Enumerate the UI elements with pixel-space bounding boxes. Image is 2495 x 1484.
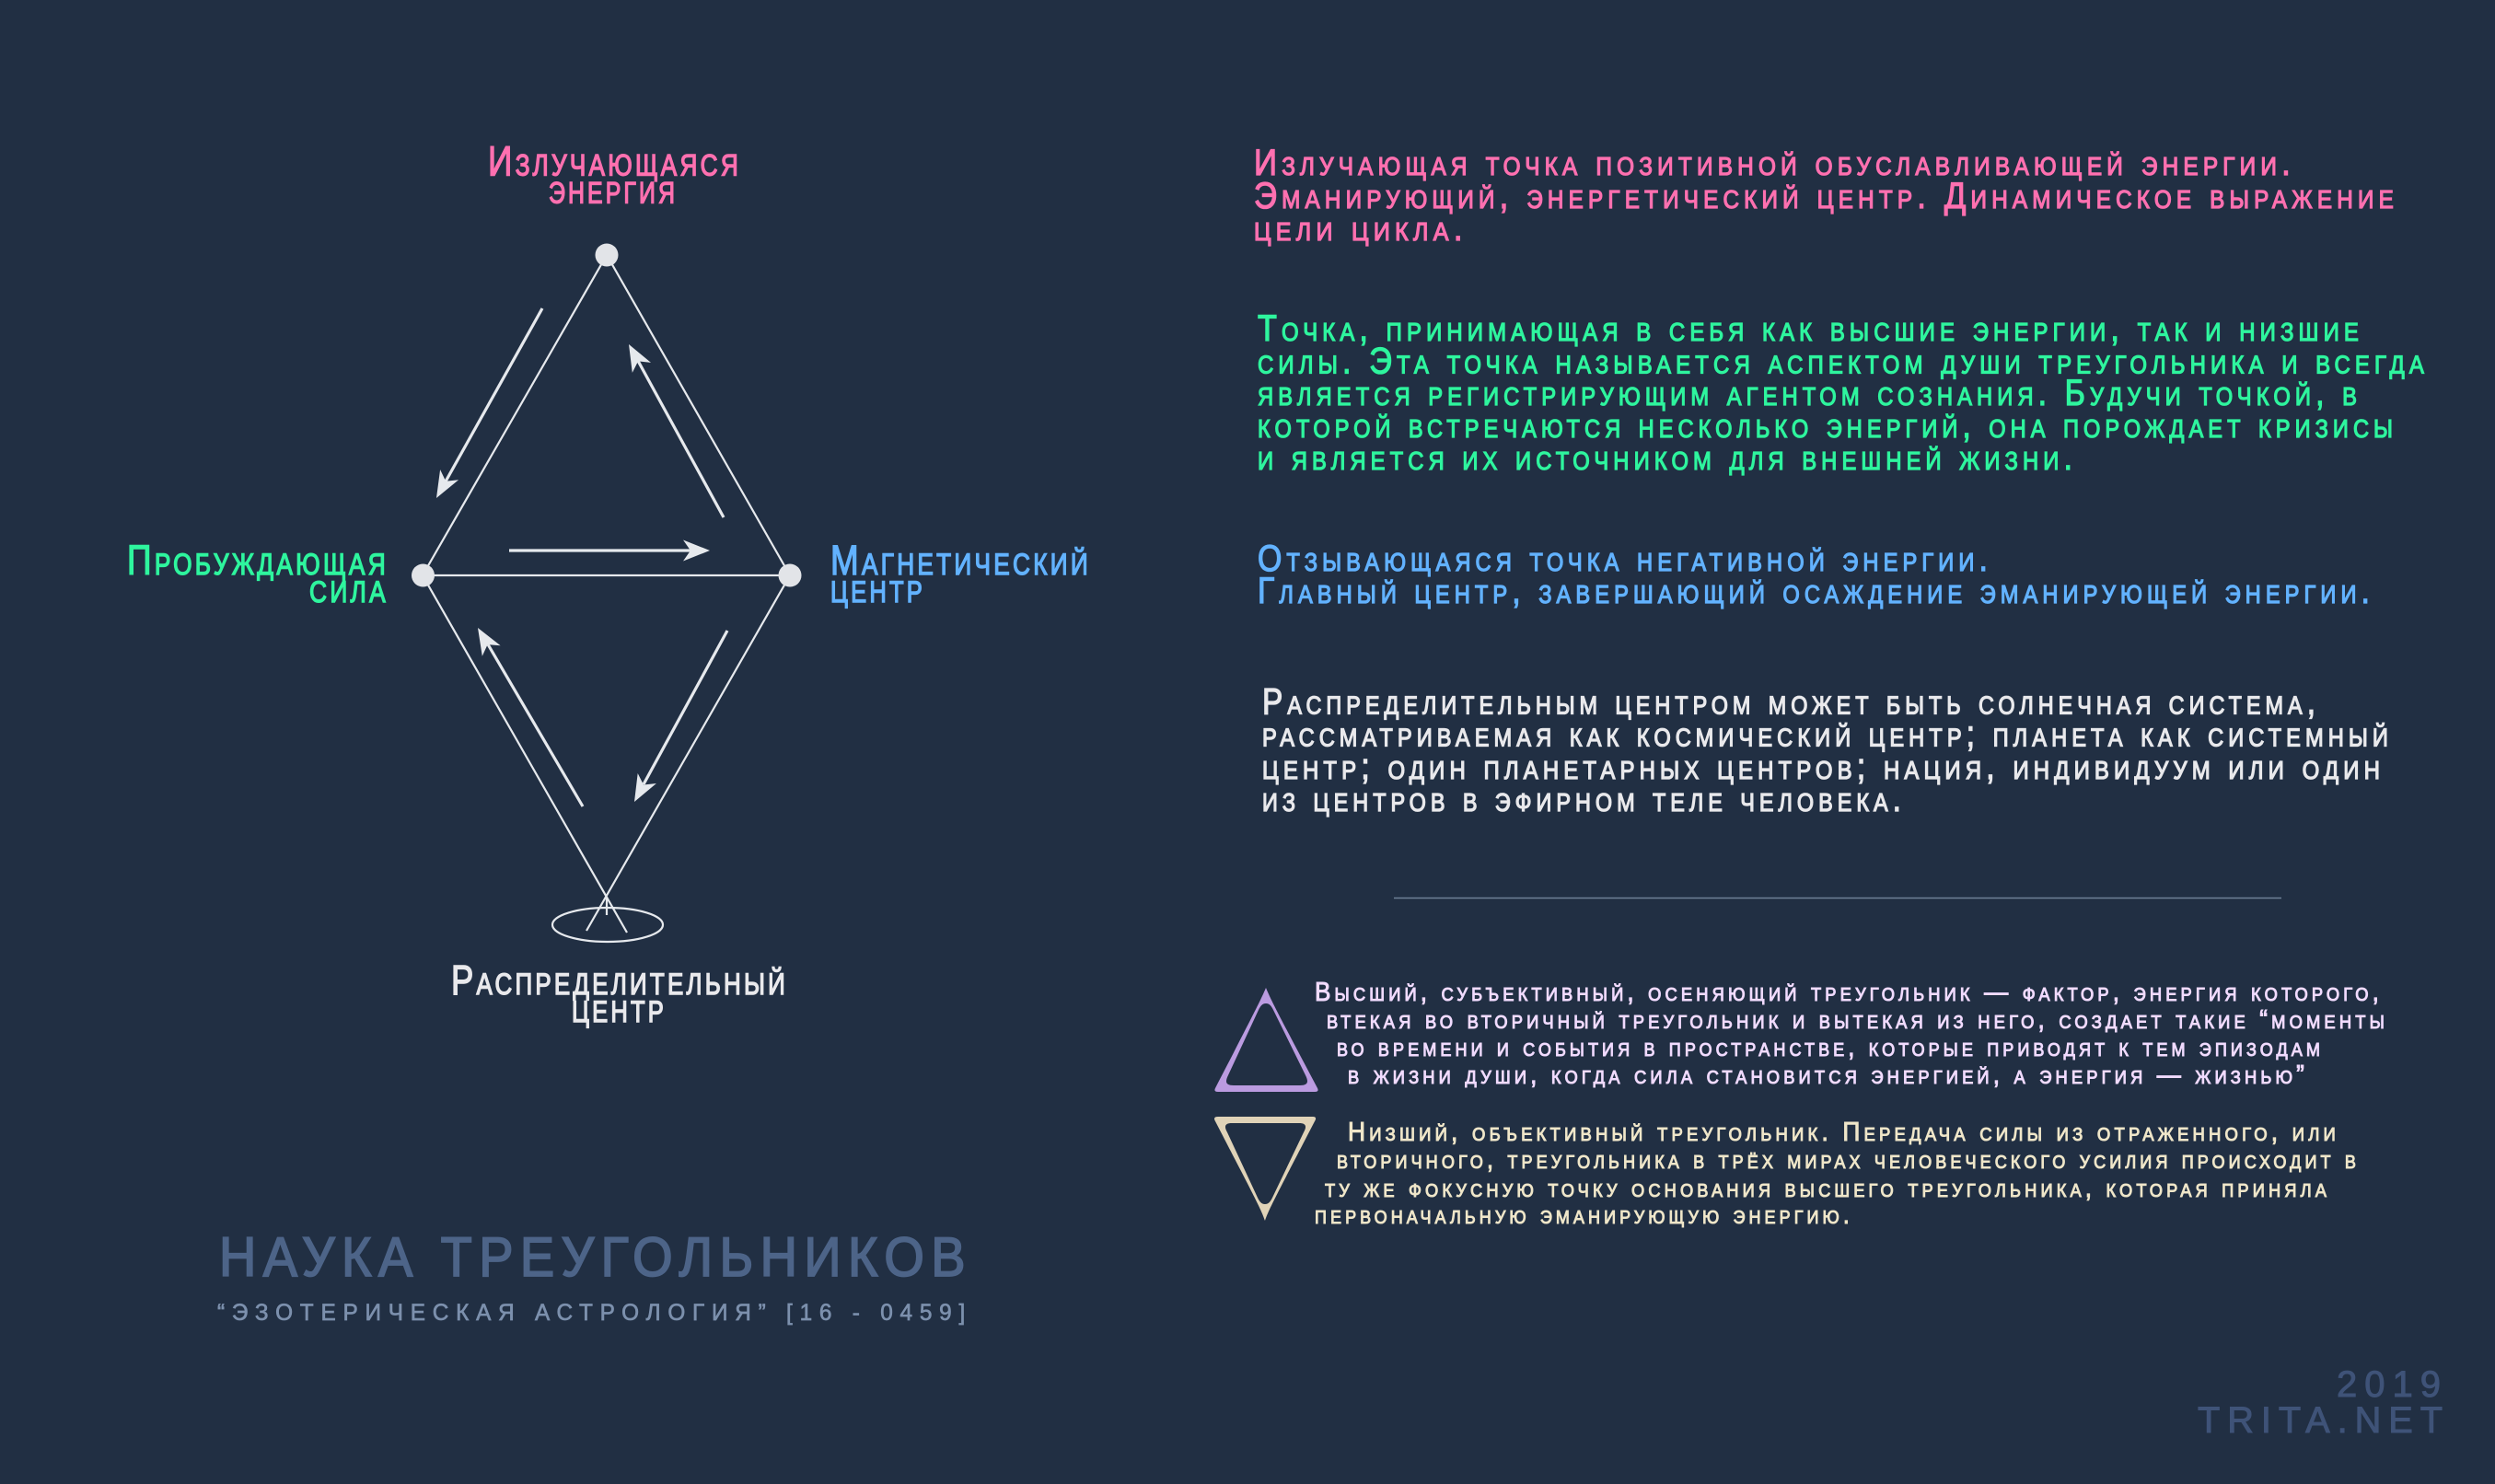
arrow: right to bottom (634, 631, 727, 802)
text block: distributing centre: из центров в эфирном теле человека. (1262, 779, 1906, 819)
label: radiating energy (488, 138, 741, 212)
arrow: bottom to left (478, 628, 583, 806)
text block: lower triangle: Низший, объективный треугольник. Передача силы из отраженного, или (1348, 1118, 2339, 1147)
text block: higher triangle: во времени и события в пространстве, которые приводят к тем эпизодам (1337, 1033, 2324, 1062)
lower triangle lines (423, 575, 790, 933)
text block: responding point: Отзывающаяся точка негативной энергии. (1258, 539, 1992, 579)
node: left (412, 563, 435, 587)
label: radiating energy: энергия (549, 166, 678, 212)
label: awakening force: сила (309, 564, 389, 611)
text block: lower triangle: вторичного, треугольника в трёх мирах человеческого усилия происходит в (1337, 1145, 2360, 1175)
label: magnetic centre: центр (830, 564, 925, 611)
upper triangle lines (423, 255, 790, 575)
text block: higher triangle: Высший, субъективный, осеняющий треугольник — фактор, энергия которого, (1315, 978, 2383, 1007)
icon: upper triangle (1214, 988, 1318, 1092)
text block: radiating point (1254, 143, 2398, 249)
text block: lower triangle (1315, 1118, 2360, 1230)
title block (217, 1226, 972, 1326)
footer: year and site: TRITA.NET (2198, 1400, 2450, 1441)
text block: receiving point (1258, 308, 2429, 478)
label: magnetic centre: Магнетический (830, 537, 1091, 584)
text block: higher triangle (1315, 978, 2388, 1090)
label: awakening force: Пробуждающая (127, 537, 389, 584)
arrow: right to top (629, 344, 724, 517)
text block: lower triangle: первоначальную эманирующую энергию. (1315, 1200, 1853, 1230)
subtitle: “ЭЗОТЕРИЧЕСКАЯ АСТРОЛОГИЯ” [16 - 0459] (217, 1300, 972, 1326)
footer: year and site (2198, 1364, 2450, 1441)
arrow: top to left (436, 308, 542, 498)
label: awakening force (127, 537, 389, 611)
text block: distributing centre (1262, 681, 2393, 819)
text block: radiating point: Излучающая точка позитивной обуславливающей энергии. (1254, 143, 2295, 183)
node: top (595, 243, 619, 267)
node: right (779, 563, 801, 587)
text block: radiating point: цели цикла. (1254, 208, 1468, 249)
arrow: left to right (509, 539, 710, 562)
text block: distributing centre: Распределительным центром может быть солнечная система, (1262, 681, 2320, 722)
icon: lower triangle (1214, 1117, 1316, 1221)
diagram: triangles of energy (412, 243, 801, 942)
label: distributing centre: центр (572, 984, 667, 1031)
text block: higher triangle: втекая во вторичный треугольник и вытекая из него, создает такие “моменты (1327, 1005, 2388, 1035)
focal ellipse (552, 908, 663, 942)
label: radiating energy: Излучающаяся (488, 138, 741, 184)
label: distributing centre (451, 956, 788, 1031)
label: magnetic centre (830, 537, 1091, 611)
text block: lower triangle: ту же фокусную точку основания высшего треугольника, которая приняла (1325, 1174, 2330, 1203)
text block: receiving point: и является их источником для внешней жизни. (1258, 437, 2077, 478)
text block: higher triangle: в жизни души, когда сила становится энергией, а энергия — жизнью” (1348, 1061, 2308, 1090)
text block: responding point (1258, 539, 2374, 611)
title: НАУКА ТРЕУГОЛЬНИКОВ (219, 1226, 972, 1288)
label: distributing centre: Распределительный (451, 956, 788, 1003)
footer: year and site: 2019 (2337, 1364, 2448, 1405)
